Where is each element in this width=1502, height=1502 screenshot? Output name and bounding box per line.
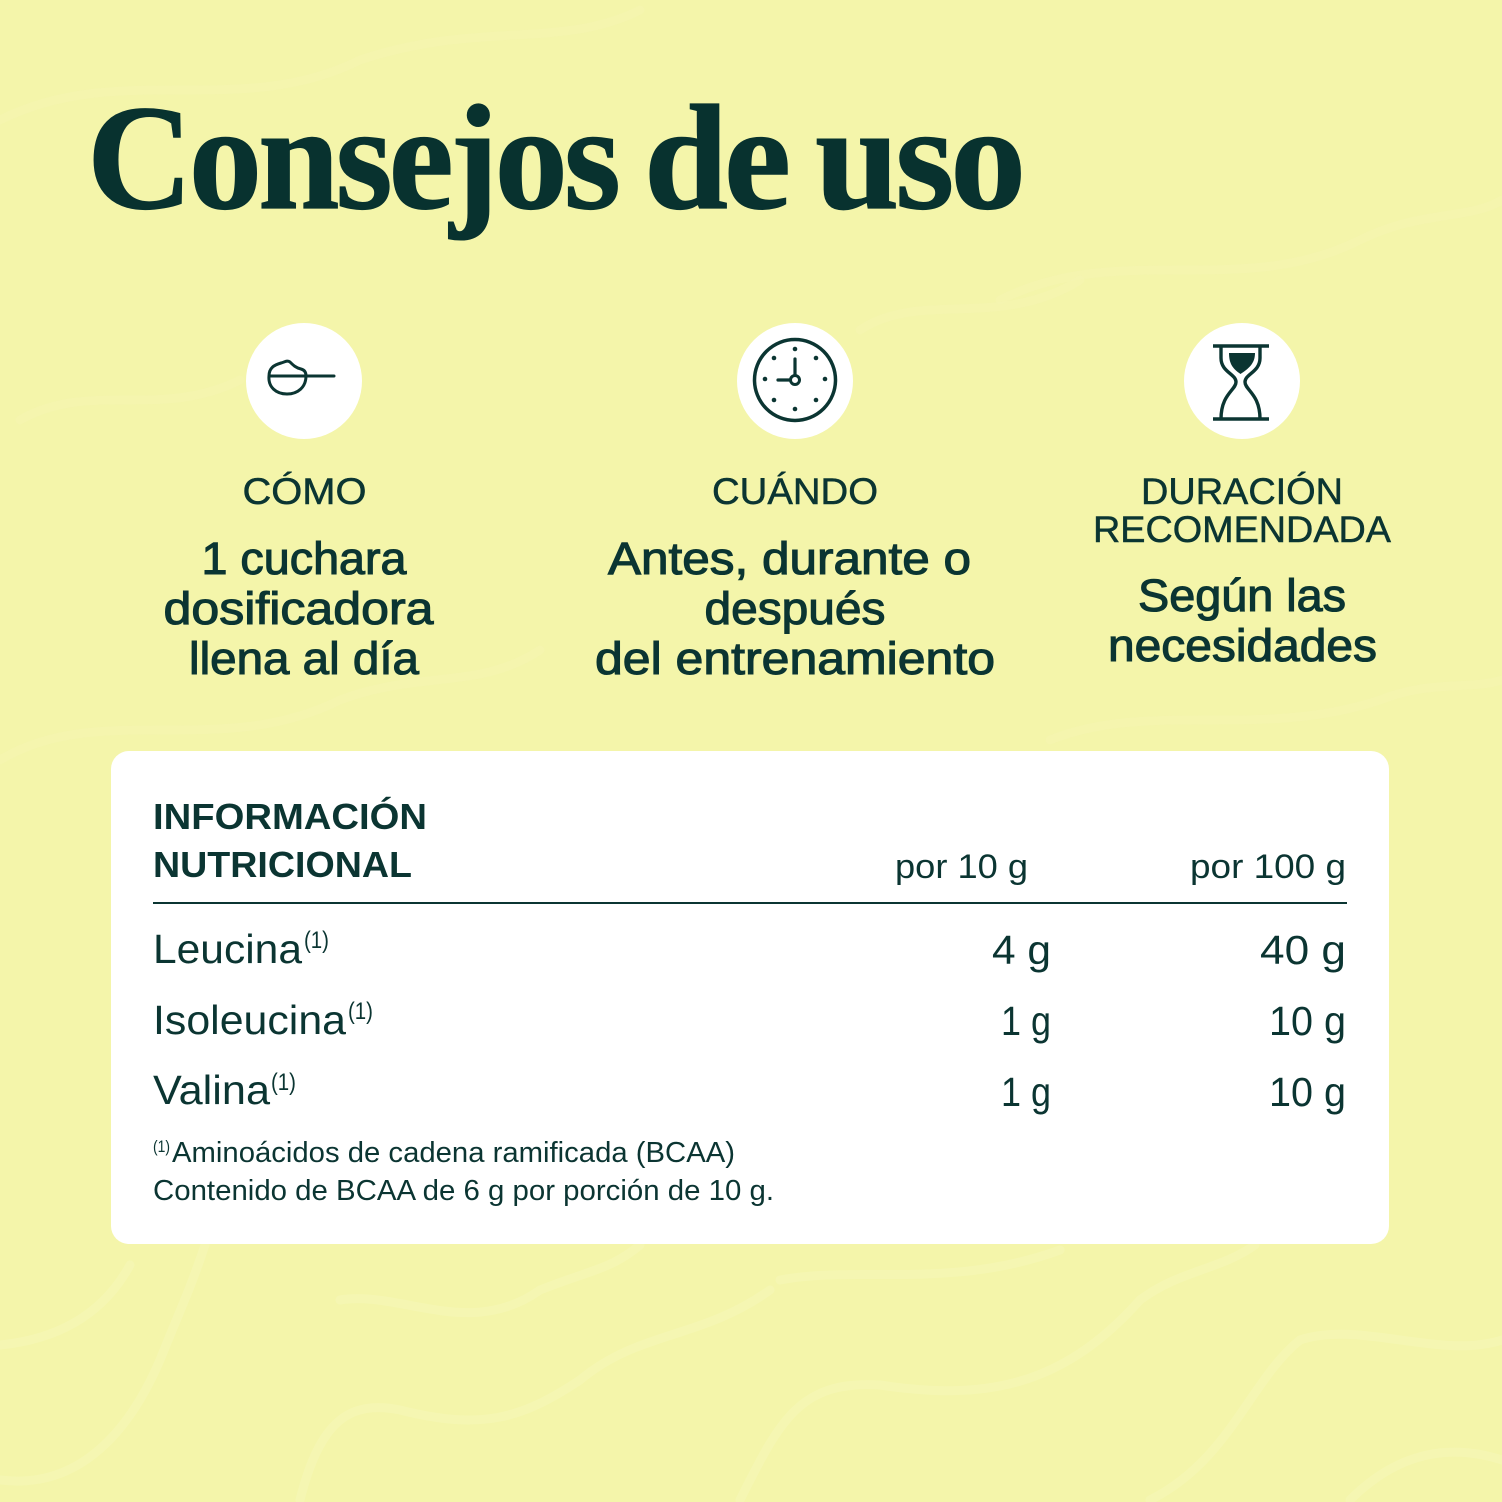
title: Consejos: [87, 75, 618, 241]
panel: nutrition table: [111, 751, 1389, 1244]
footnote: [153, 1137, 774, 1207]
icon: hourglass: [1184, 323, 1300, 439]
text: timing: del entrenamiento: [595, 633, 995, 684]
row: isoleucina: 1 g: [1001, 998, 1051, 1044]
row: valina: (1): [271, 1069, 296, 1096]
column header: por 100 g: por 100 g: [1190, 848, 1346, 886]
heading: duración recomendada: RECOMENDADA: [1093, 509, 1391, 550]
text: duration: Según las: [1138, 570, 1346, 621]
text: timing: después: [704, 583, 886, 634]
row: valina: Valina: [153, 1067, 270, 1113]
panel: cuándo: [595, 323, 995, 684]
heading: cómo: CÓMO: [242, 471, 366, 512]
icon: scoop: [246, 323, 362, 439]
icon: clock: [737, 323, 853, 439]
table heading: NUTRICIONAL: [153, 844, 412, 885]
heading: duración recomendada: DURACIÓN: [1141, 471, 1343, 512]
text: timing: [595, 533, 995, 684]
row: valina: [153, 1067, 1346, 1115]
footnote: Contenido de BCAA de 6 g por porción de 10 g.: [153, 1175, 774, 1207]
row: isoleucina: [153, 997, 1346, 1044]
row: leucina: Leucina: [153, 926, 302, 972]
panel: duración: [1093, 323, 1391, 671]
title: uso: [815, 75, 1022, 241]
column header: por 10 g: por 10 g: [895, 848, 1028, 886]
heading: cuándo: CUÁNDO: [712, 471, 878, 512]
text: duration: necesidades: [1108, 620, 1377, 671]
title: [87, 75, 1022, 241]
heading: duración recomendada: [1093, 471, 1391, 550]
row: leucina: (1): [304, 927, 329, 954]
title: de: [644, 75, 787, 241]
footnote: Aminoácidos de cadena ramificada (BCAA): [172, 1137, 735, 1169]
row: isoleucina: (1): [348, 998, 373, 1025]
text: dose: [164, 533, 435, 684]
row: leucina: 4 g: [992, 927, 1051, 973]
row: leucina: [153, 926, 1346, 973]
text: timing: Antes, durante o: [608, 533, 971, 584]
row: leucina: 40 g: [1260, 927, 1346, 973]
row: isoleucina: Isoleucina: [153, 997, 346, 1043]
row: isoleucina: 10 g: [1269, 998, 1346, 1044]
text: dose: llena al día: [189, 633, 420, 684]
row: valina: 1 g: [1001, 1069, 1051, 1115]
text: duration: [1108, 570, 1377, 671]
row: valina: 10 g: [1269, 1069, 1346, 1115]
panel: cómo: [164, 323, 435, 684]
table heading: [153, 795, 427, 885]
text: dose: 1 cuchara: [202, 533, 408, 584]
text: dose: dosificadora: [164, 583, 435, 634]
table heading: INFORMACIÓN: [153, 795, 427, 837]
footnote: (1): [153, 1137, 170, 1156]
